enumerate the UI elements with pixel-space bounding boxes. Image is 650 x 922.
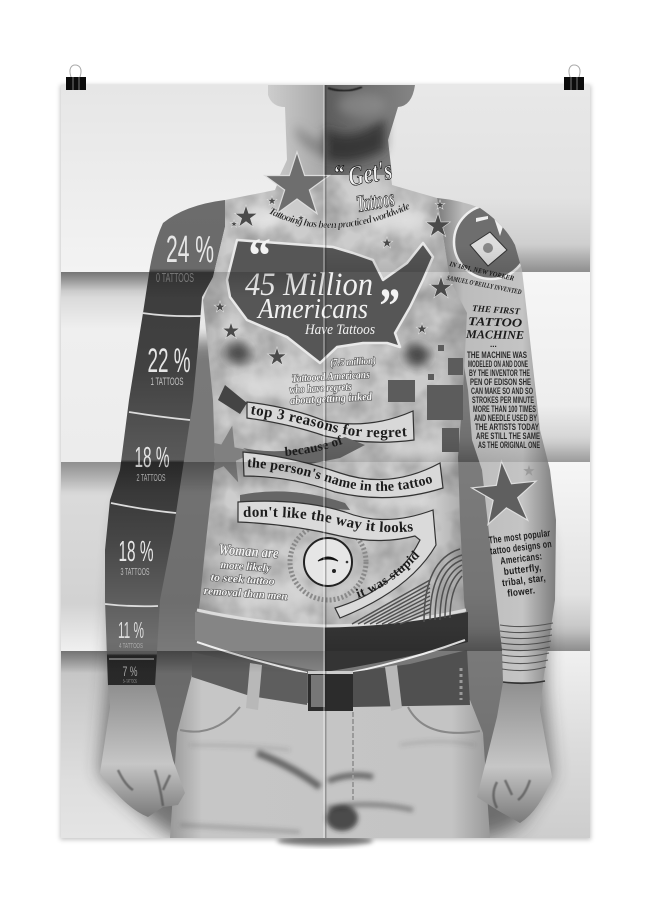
left arm statistics: [118, 229, 214, 685]
vertical centre fold: [323, 85, 326, 838]
ribbon text: stupid: it was stupid: [356, 550, 420, 598]
heading: 45 million Americans: [245, 227, 399, 338]
stat 11 percent: 4 TATTOOS: [119, 643, 143, 650]
right arm: [437, 198, 556, 682]
arm paragraph: MORE THAN 100 TIMES: [473, 404, 536, 414]
arm paragraph: STROKES PER MINUTE: [472, 395, 534, 405]
stat 22 percent: 1 TATTOOS: [150, 376, 184, 388]
right hand shading: [494, 780, 530, 808]
neck star: [265, 152, 329, 214]
shoulder badge: [454, 205, 528, 279]
arm paragraph: AS THE ORIGINAL ONE: [478, 440, 540, 450]
stat 18 percent three: 18 %: [118, 536, 154, 568]
neck and chin: [268, 85, 415, 175]
binder clip right: [564, 65, 584, 90]
heading: 45 million Americans: Have Tattoos: [304, 322, 375, 338]
jeans pockets and fly: [180, 707, 480, 800]
mouth: [328, 87, 362, 91]
note: regret figures: [288, 356, 378, 407]
note: women more likely: Woman are: [218, 542, 279, 562]
forearm small star: [523, 465, 535, 476]
torso: [195, 150, 468, 640]
poster sheet with fold bands: [61, 85, 590, 838]
underwear band: [195, 610, 468, 673]
stat 24 percent: [156, 229, 214, 285]
arm paragraph: ARE STILL THE SAME: [476, 431, 540, 441]
stat 24 percent: 0 TATTOOS: [156, 270, 194, 285]
arm text: tattoo machine: ...: [490, 340, 497, 349]
left hand: [100, 685, 185, 817]
torso skin texture: [195, 160, 470, 640]
heading: 45 million Americans: ”: [377, 277, 399, 333]
arm text: tattoo machine: MACHINE: [465, 327, 524, 342]
ribbon middle: [242, 435, 444, 498]
heading: 45 million Americans: Americans: [256, 293, 368, 325]
left sleeve arm: [105, 200, 225, 686]
arm paragraph: AND NEEDLE USED BY: [474, 413, 537, 423]
forearm big star: [469, 458, 540, 526]
jeans folds: [180, 742, 475, 832]
note: women more likely: to seek tattoo: [210, 571, 276, 588]
arm paragraph: THE MACHINE WAS: [467, 350, 527, 360]
ribbon text: name in tattoo: the person's name in the tattoo: [248, 458, 432, 492]
photo of man: [100, 85, 556, 838]
stat 7 percent: 7 %: [122, 663, 138, 679]
arm paragraph: BY THE INVENTOR THE: [469, 368, 530, 378]
beard shading: [296, 93, 386, 162]
stat 11 percent: 11 %: [118, 617, 144, 643]
arm paragraph: [467, 350, 540, 450]
lower right line pattern: [352, 549, 462, 624]
forearm popular designs text: flower.: [507, 585, 536, 600]
note: women more likely: [203, 541, 291, 603]
stat 18 percent two: 2 TATTOOS: [136, 473, 166, 484]
left hand shading: [118, 770, 170, 806]
stat 7 percent: [122, 663, 138, 685]
neck script: gets tattoos: Tattoos: [355, 186, 396, 218]
left arm statistics: 5+ TATTOOS: [123, 679, 137, 685]
heading: 45 million Americans: 45 Million: [245, 267, 373, 303]
right hand: [477, 682, 552, 823]
heading: 45 million Americans: “: [246, 227, 270, 283]
ribbon caption: because of: because of: [284, 435, 343, 456]
neck script: gets tattoos: [333, 155, 396, 218]
note: regret figures: about getting inked: [290, 391, 373, 407]
note: women more likely: more likely: [220, 559, 271, 575]
forearm popular designs text: [488, 528, 558, 601]
poster drop shadow: [60, 85, 591, 846]
jeans: [170, 675, 490, 838]
binder clip left: [66, 65, 86, 90]
stat 18 percent three: 3 TATTOOS: [120, 567, 150, 578]
navel circle: [290, 524, 366, 600]
forearm popular designs text: tattoo designs on: [490, 539, 552, 557]
wrist rings: [500, 623, 553, 683]
note: regret figures: (7.5 million): [330, 356, 376, 369]
arm paragraph: CAN MAKE SO AND SO: [471, 386, 533, 396]
lower left torso star: [214, 426, 250, 482]
horizontal fold shading across figure: [61, 246, 590, 673]
forearm popular designs text: tribal, star,: [501, 573, 547, 589]
stat 24 percent: 24 %: [166, 229, 214, 271]
neck script: gets tattoos: “: [333, 160, 344, 185]
neck script: gets tattoos: Get's: [346, 155, 395, 193]
ribbon text: dont like: don't like the way it looks: [244, 506, 413, 532]
arm paragraph: PEN OF EDISON SHE: [470, 377, 531, 387]
ribbon text: top 3 reasons: top 3 reasons for regret: [251, 406, 407, 440]
forearm popular designs text: butterfly,: [503, 562, 542, 578]
arm paragraph: THE ARTISTS TODAY: [475, 422, 539, 432]
forearm popular designs text: Americans:: [500, 551, 543, 567]
scattered stars: [214, 196, 452, 365]
USA map: [227, 240, 433, 363]
stat 22 percent: [148, 342, 190, 388]
stat 18 percent two: [134, 442, 170, 484]
arm text: tattoo machine: THE FIRST: [472, 303, 521, 316]
stat 18 percent two: 18 %: [134, 442, 170, 474]
collar ribbon text: Tattooing has been practiced worldwide: [268, 204, 410, 230]
arm text: tattoo machine: [446, 260, 524, 349]
figure shadow on poster: [100, 340, 552, 838]
arm text: tattoo machine: IN 1891, NEW YORKER: [448, 260, 515, 283]
stat 18 percent three: [118, 536, 154, 578]
arm text: tattoo machine: SAMUEL O'REILLY INVENTED: [446, 274, 522, 296]
stat 11 percent: [118, 617, 144, 650]
forearm popular designs text: The most popular: [488, 528, 551, 547]
note: regret figures: who have regrets: [289, 381, 352, 396]
ribbon top: [218, 385, 415, 443]
arm text: tattoo machine: TATTOO: [468, 314, 523, 330]
stat 22 percent: 22 %: [148, 342, 190, 380]
ribbon lower with tail: [237, 491, 437, 619]
arm divider lines: [105, 313, 201, 659]
note: regret figures: Tattooed Americans: [292, 369, 370, 385]
squares pattern: [388, 345, 463, 452]
arm paragraph: MODELED ON AND DONE: [468, 359, 528, 369]
note: women more likely: removal than men: [203, 585, 288, 603]
torso tattoo mottling: [225, 176, 450, 609]
belt: [192, 650, 470, 711]
